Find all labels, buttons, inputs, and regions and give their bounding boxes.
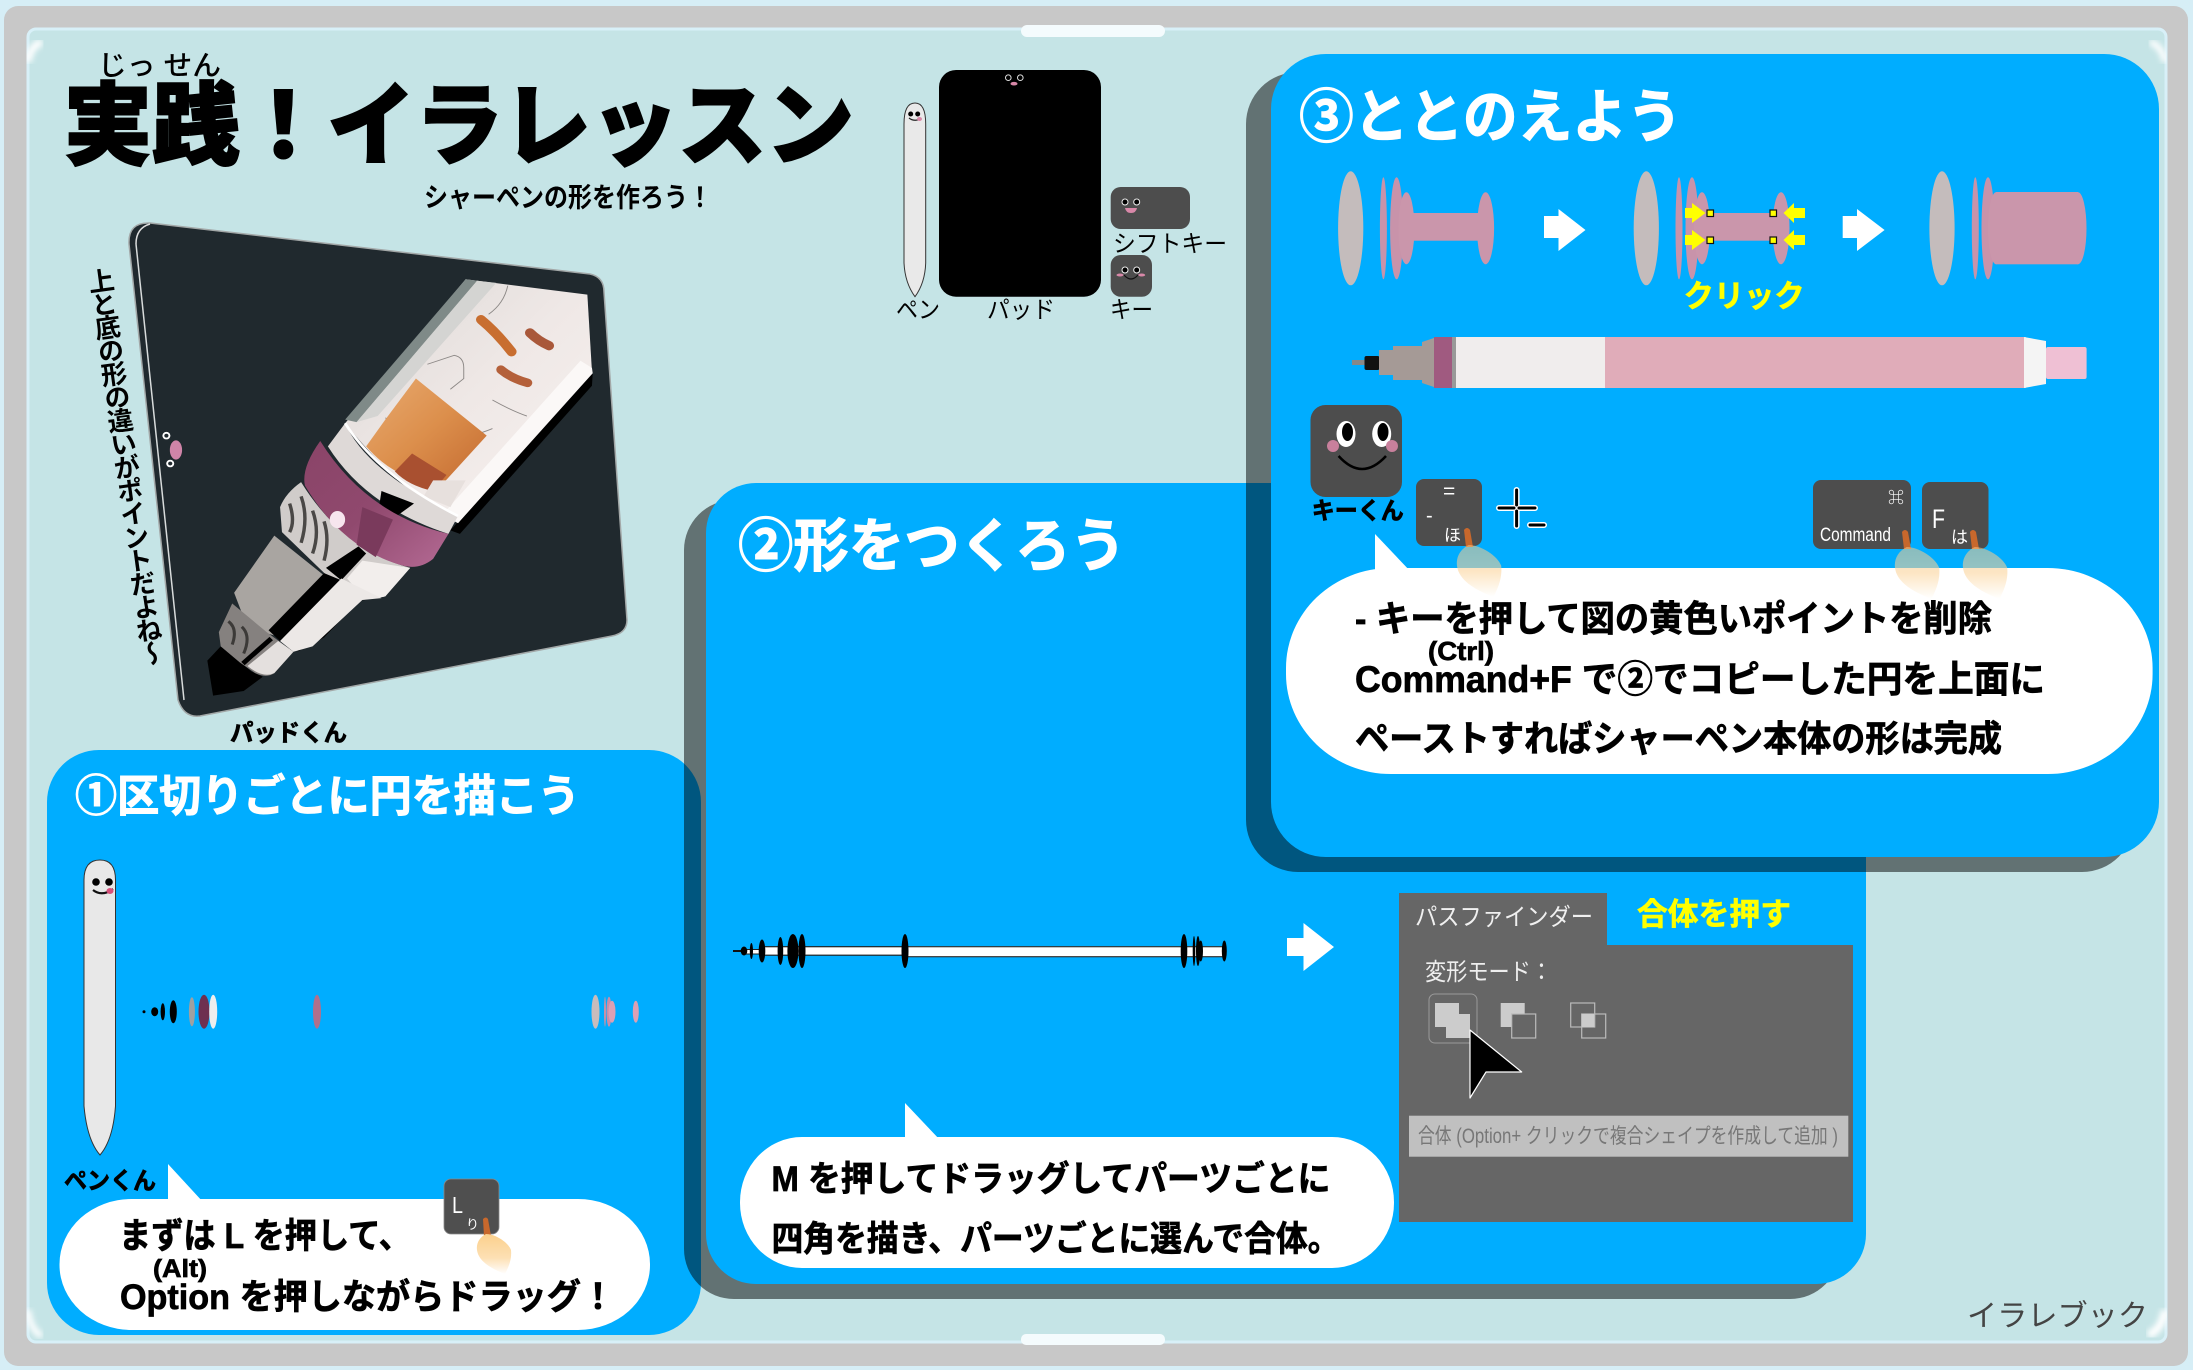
command key: Command [1820, 525, 1891, 546]
legend: pad character [939, 70, 1101, 324]
pen character [84, 860, 116, 1155]
arrow [1287, 923, 1334, 971]
brand signature: イラレブック [1967, 1300, 2148, 1333]
key L with finger: L [452, 1192, 463, 1218]
panel 3 shadow [1246, 72, 2134, 872]
panel 3: tidy up [1271, 54, 2159, 857]
minus key [1416, 479, 1482, 546]
speech bubble 1: (Alt) [153, 1255, 207, 1283]
pathfinder panel: パスファインダー [1415, 904, 1593, 931]
F key [1922, 482, 1988, 549]
title: じっ せん [98, 50, 221, 81]
outlined pencil sketch [733, 934, 1227, 968]
panel 2: build shapes [706, 483, 1866, 1284]
pen name label: ペンくん [64, 1168, 156, 1195]
speech bubble 3: Command+F で②でコピーした円を上面に [1355, 659, 2045, 700]
pathfinder panel: 変形モード： [1425, 959, 1552, 986]
spool step 1 [1338, 171, 1494, 285]
subtitle: シャーペンの形を作ろう！ [424, 183, 712, 213]
spool step 2 [1634, 171, 1805, 285]
command key: ⌘ [1888, 489, 1904, 507]
speech bubble 2: 四角を描き、パーツごとに選んで合体。 [772, 1220, 1340, 1259]
tooltip: 合体 (Option+ クリックで複合シェイプを作成して追加 ) [1418, 1125, 1838, 1148]
pathfinder button: intersect [1571, 1003, 1606, 1038]
speech bubble 2: M を押してドラッグしてパーツごとに [772, 1160, 1330, 1199]
F key: F [1932, 504, 1945, 534]
pad face [163, 433, 182, 466]
speech bubble 3: (Ctrl) [1428, 636, 1494, 666]
panel 1 heading: ①区切りごとに円を描こう [75, 772, 580, 821]
panel 2 shadow [684, 500, 1840, 1299]
minus key: - [1426, 505, 1433, 527]
speech bubble 3: ペーストすればシャーペン本体の形は完成 [1355, 718, 2002, 759]
speech bubble 3: - キーを押して図の黄色いポイントを削除 [1355, 598, 1992, 639]
minus key: = [1443, 480, 1455, 503]
speech bubble 1 [60, 1164, 650, 1330]
panel 1: draw ellipses [47, 750, 701, 1335]
legend: shift key character [1111, 187, 1227, 258]
pathfinder button: minus front [1501, 1003, 1536, 1038]
mouse cursor [1470, 1030, 1522, 1098]
speech bubble 1: まずは L を押して、 [119, 1217, 411, 1256]
tooltip [1409, 1116, 1848, 1157]
pathfinder button: unite [1429, 994, 1477, 1043]
legend: pad character: パッド [987, 297, 1055, 324]
character legend [896, 70, 1227, 324]
title: 実践！イラレッスン [64, 77, 854, 177]
pathfinder panel [1399, 893, 1853, 1222]
eraser cursor [1499, 490, 1544, 526]
spool step 3 [1929, 171, 2086, 285]
pad hint vertical text: 上と底の形の違いがポイントだよね〜 [83, 266, 167, 668]
anchor points [1707, 210, 1776, 244]
pad illustration with mechanical pencil [129, 223, 627, 716]
speech bubble 2 [740, 1103, 1394, 1268]
pressing fingers [1457, 528, 2007, 599]
minus key: ほ [1444, 526, 1461, 545]
assembled pencil [1352, 337, 2087, 388]
yellow point arrows [1685, 203, 1805, 250]
panel 2 heading: ②形をつくろう [738, 514, 1126, 579]
legend: key character [1110, 255, 1153, 324]
yellow callout: 合体を押す [1637, 897, 1791, 932]
speech bubble 1: Option を押しながらドラッグ！ [120, 1278, 615, 1317]
key L with finger: り [466, 1217, 479, 1232]
click label: クリック [1684, 279, 1805, 314]
key character large: キーくん [1312, 498, 1404, 525]
command key [1813, 480, 1911, 549]
key character large [1310, 405, 1404, 525]
speech bubble 3 [1286, 534, 2153, 774]
section ellipses [142, 995, 639, 1029]
legend: key character: キー [1110, 297, 1153, 324]
pad name label: パッドくん [230, 720, 347, 747]
arrow [1544, 209, 1586, 251]
legend: shift key character: シフトキー [1113, 231, 1227, 258]
legend: pen character: ペン [896, 297, 940, 324]
panel 3 heading: ③ととのえよう [1299, 85, 1682, 150]
F key: は [1951, 528, 1968, 547]
arrow [1843, 209, 1885, 251]
key L with finger [444, 1179, 511, 1274]
pencil drawing [207, 279, 593, 696]
legend: pen character [896, 103, 940, 324]
